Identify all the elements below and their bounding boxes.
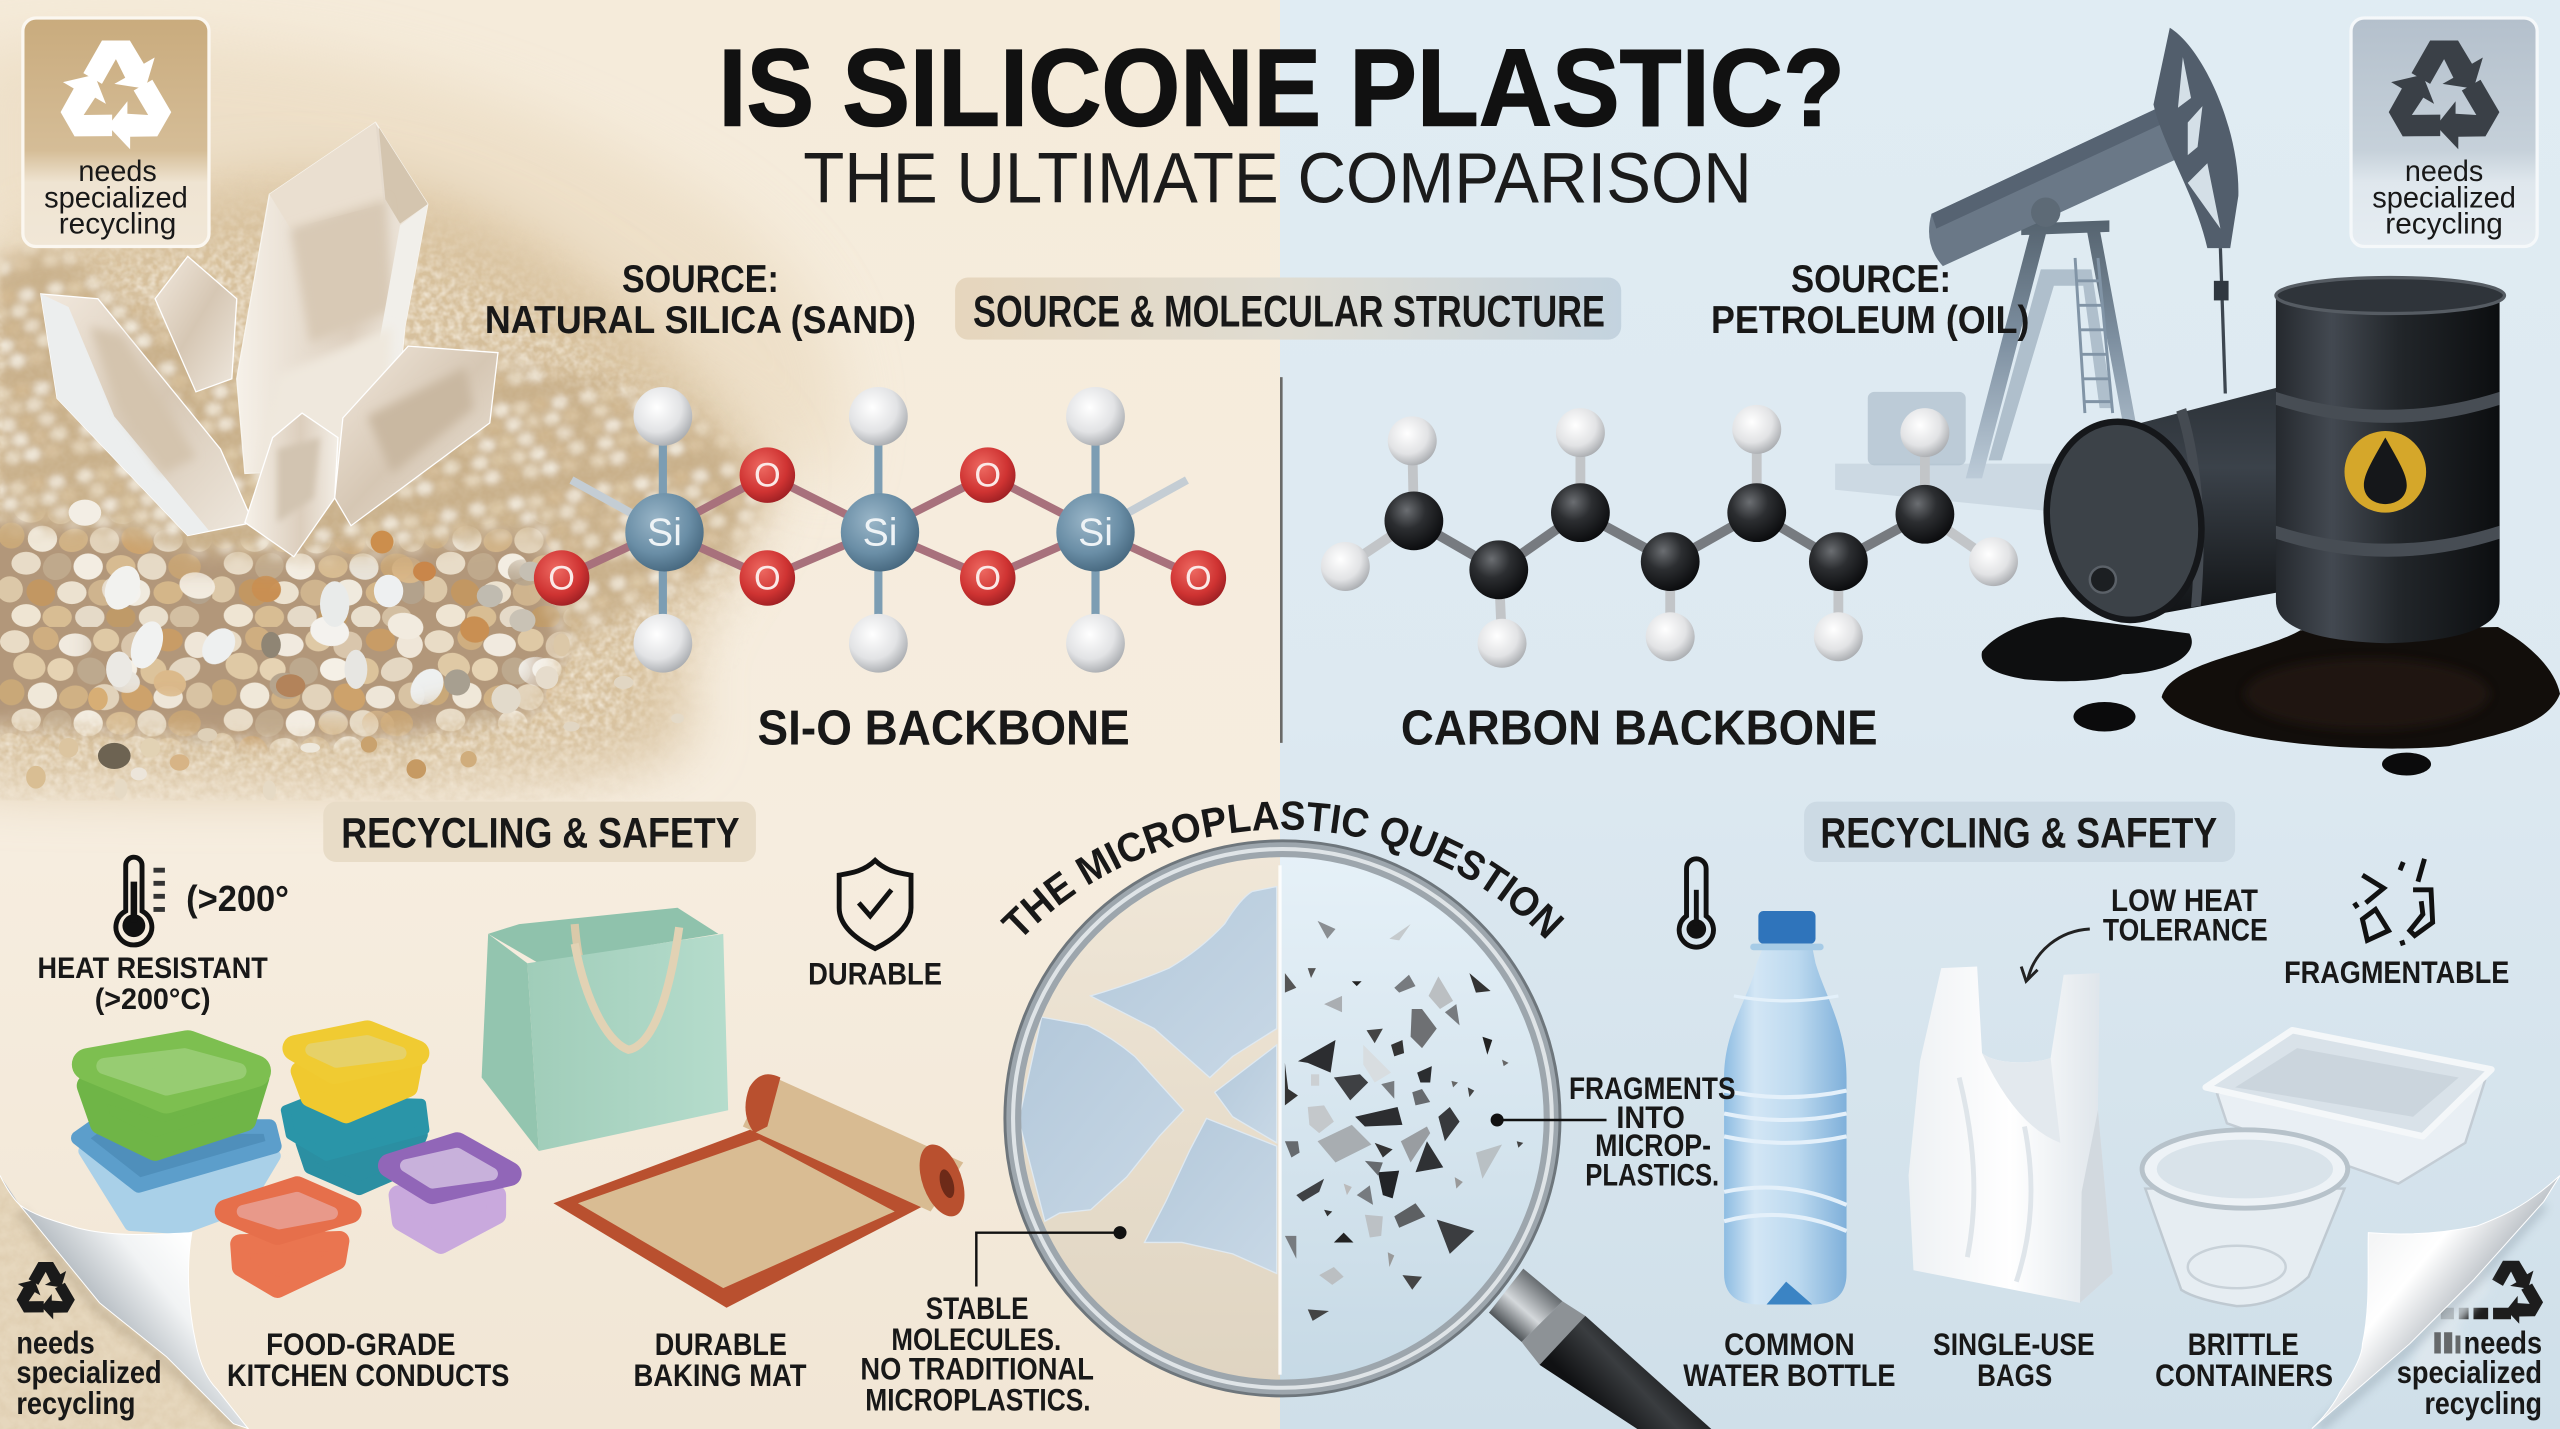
container: tray [2206, 1030, 2491, 1184]
labels: silicone products: KITCHEN CONDUCTS [227, 1358, 509, 1393]
callout: stable molecules: MOLECULES. [891, 1322, 1061, 1357]
title [718, 28, 1845, 218]
section pill: recycling and safety right: RECYCLING & SAFETY [1820, 809, 2217, 856]
callout: fragments into microplastics [1491, 1071, 1736, 1192]
badge: recycling left [23, 18, 209, 247]
oil pump jack [1835, 28, 2238, 519]
icon: recycle small left [10, 1262, 80, 1324]
badge: recycling right [2351, 18, 2537, 247]
badge: recycling right: specialized [2372, 181, 2516, 214]
background right [1280, 0, 2560, 1429]
callout: stable molecules: NO TRADITIONAL [860, 1352, 1094, 1387]
icon: recycle dark [2376, 40, 2509, 158]
silicone molecule: O [754, 457, 781, 495]
section pill: source and molecular structure: SOURCE & MOLECULAR STRUCTURE [973, 288, 1605, 337]
source label: petroleum: SOURCE: [1791, 258, 1951, 301]
container: cup [2142, 1130, 2348, 1306]
callout: low heat tolerance: TOLERANCE [2103, 912, 2268, 947]
silicone molecule [534, 387, 1226, 673]
icon: oil drop [2344, 431, 2426, 513]
label: heat resistant [38, 952, 268, 1016]
source label: silica: SOURCE: [622, 258, 779, 301]
microplastic shards [1285, 921, 1523, 1321]
plastic single-use bag [1909, 967, 2113, 1303]
peeled corner right: needs [2464, 1325, 2542, 1360]
callout: stable molecules: MICROPLASTICS. [865, 1383, 1091, 1418]
label: si-o backbone: SI-O BACKBONE [758, 701, 1130, 755]
labels: plastic products: SINGLE-USE [1933, 1327, 2095, 1362]
peeled corner left: needs [16, 1325, 95, 1360]
label: >200 degrees: (>200° [186, 878, 289, 919]
scattered pebbles [26, 500, 684, 800]
icon: recycle white [48, 40, 181, 158]
label: durable: DURABLE [808, 956, 942, 991]
callout: low heat tolerance [2021, 883, 2268, 981]
upright barrel [2276, 278, 2504, 643]
silicone molecule: Si [863, 511, 897, 554]
title: IS SILICONE PLASTIC? [718, 28, 1845, 150]
section pill: recycling and safety left [323, 802, 756, 862]
silicone molecule: Si [647, 511, 682, 554]
background left [0, 0, 1280, 1429]
subtitle: THE ULTIMATE COMPARISON [803, 138, 1752, 218]
callout: fragments into microplastics: PLASTICS. [1585, 1157, 1719, 1192]
silicone pieces [1019, 887, 1277, 1273]
plastic water bottle [1724, 911, 1847, 1304]
labels: silicone products: BAKING MAT [633, 1358, 807, 1393]
icon: fragmentable [2354, 859, 2433, 945]
source label: silica [485, 258, 916, 342]
crystal cluster [41, 122, 498, 557]
callout: low heat tolerance: LOW HEAT [2111, 883, 2258, 918]
container: yellow [296, 1033, 416, 1113]
labels: plastic products: WATER BOTTLE [1683, 1358, 1896, 1393]
silicone molecule: O [974, 559, 1001, 597]
icon: recycle small right [2492, 1261, 2548, 1329]
magnifying glass lens [1005, 841, 1560, 1396]
lying barrel [2033, 385, 2286, 631]
sand and crystal scene [0, 37, 849, 800]
callout: fragments into microplastics: MICROP- [1595, 1128, 1711, 1163]
silicone molecule: Si [1078, 511, 1113, 554]
labels: plastic products: CONTAINERS [2155, 1358, 2333, 1393]
silicone baking mat [553, 1074, 973, 1308]
peeled corner left [0, 1176, 253, 1429]
label: fragmentable: FRAGMENTABLE [2284, 955, 2509, 990]
container: blue [78, 1127, 274, 1228]
label: carbon backbone: CARBON BACKBONE [1401, 701, 1878, 755]
section pill: recycling and safety left: RECYCLING & SAFETY [341, 809, 740, 856]
oil puddles [1982, 617, 2560, 776]
icon: shield durable [839, 860, 911, 949]
peeled corner right: recycling [2424, 1386, 2542, 1421]
labels: plastic products [1683, 1327, 2333, 1393]
silicone molecule: O [1185, 559, 1212, 597]
source label: petroleum [1711, 258, 2029, 342]
label: heat resistant: HEAT RESISTANT [38, 952, 268, 985]
labels: plastic products: BAGS [1977, 1358, 2052, 1393]
section pill: source and molecular structure [955, 278, 1621, 340]
container: orange [227, 1189, 349, 1288]
peeled corner right [2312, 1176, 2560, 1429]
badge: recycling right: recycling [2385, 207, 2503, 240]
callout: fragments into microplastics: INTO [1616, 1100, 1685, 1135]
source label: petroleum: PETROLEUM (OIL) [1711, 299, 2029, 342]
callout: stable molecules: STABLE [926, 1291, 1029, 1326]
silicone bag [482, 908, 728, 1151]
labels: silicone products: DURABLE [655, 1327, 787, 1362]
source label: silica: NATURAL SILICA (SAND) [485, 299, 916, 342]
icon: thermometer low heat [1679, 859, 1713, 947]
container: purple [390, 1144, 509, 1244]
container: green [88, 1047, 258, 1149]
badge: recycling right: needs [2405, 155, 2483, 188]
callout: stable molecules [860, 1226, 1127, 1418]
silicone molecule: O [974, 457, 1001, 495]
label: heat resistant: (>200°C) [95, 983, 211, 1016]
callout: fragments into microplastics: FRAGMENTS [1569, 1071, 1736, 1106]
badge: recycling left: needs [78, 155, 157, 188]
silicone food containers [78, 1033, 509, 1288]
icon: thermometer heat resistant [116, 857, 165, 945]
labels: silicone products [227, 1327, 807, 1393]
labels: plastic products: COMMON [1724, 1327, 1855, 1362]
badge: recycling left: recycling [59, 207, 176, 240]
peeled corner right: specialized [2397, 1355, 2542, 1390]
arc title: the microplastic question: THE MICROPLASTIC QUESTION [1000, 801, 1564, 939]
peeled corner left: specialized [16, 1355, 162, 1390]
carbon molecule [1321, 405, 2018, 668]
container: teal [286, 1100, 424, 1189]
silicone molecule: O [548, 559, 575, 597]
labels: silicone products: FOOD-GRADE [266, 1327, 456, 1362]
brittle plastic containers [2142, 1030, 2491, 1306]
magnifying glass handle [1489, 1269, 1713, 1429]
silicone molecule: O [754, 559, 781, 597]
peeled corner left: recycling [16, 1386, 136, 1421]
labels: plastic products: BRITTLE [2188, 1327, 2299, 1362]
badge: recycling left: specialized [44, 181, 188, 214]
section pill: recycling and safety right [1804, 802, 2235, 862]
